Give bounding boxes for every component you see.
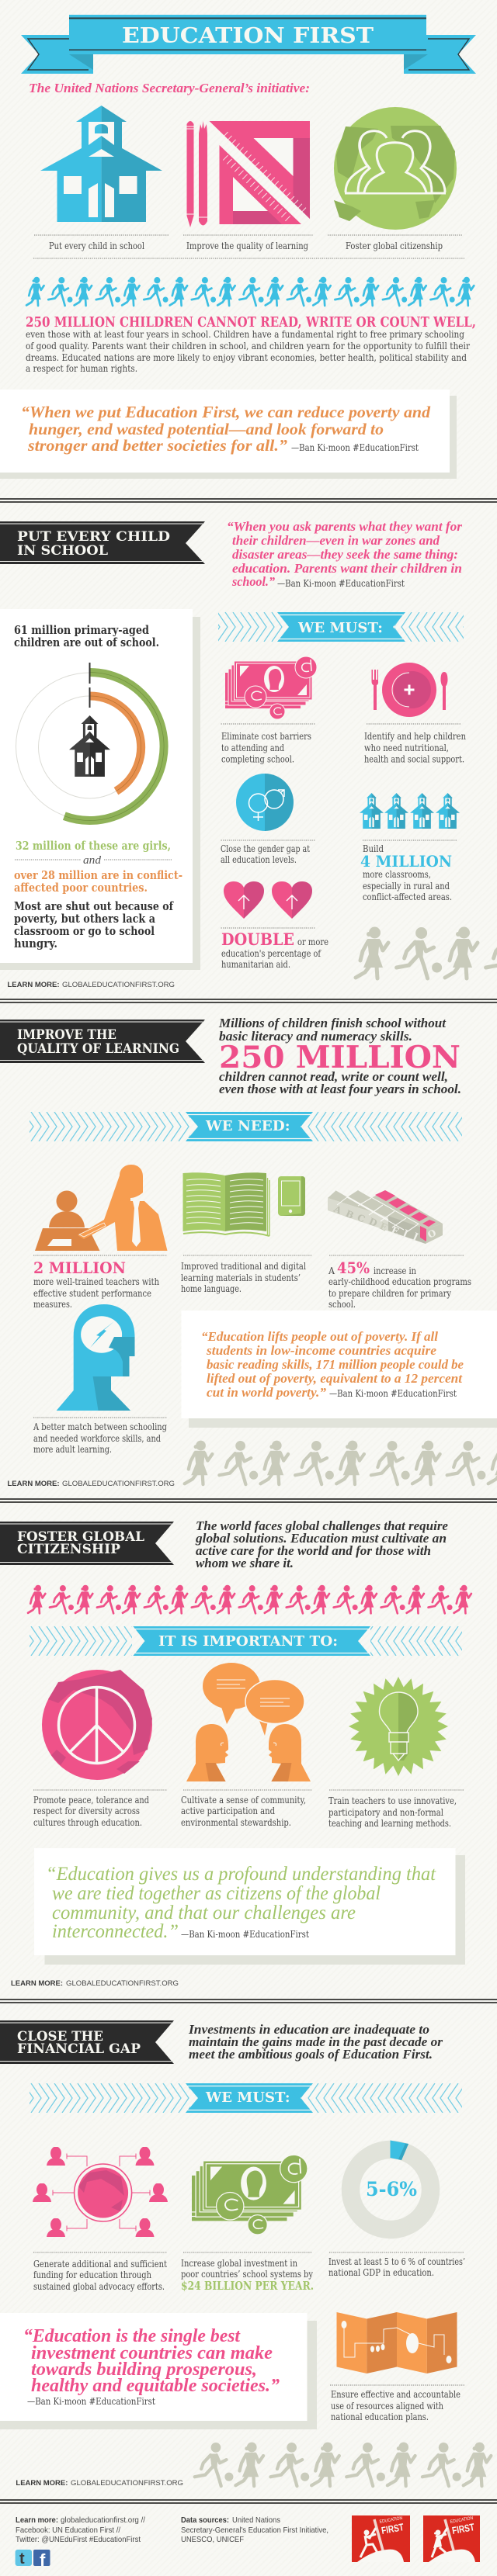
text: early childhood: school. bbox=[328, 1298, 356, 1310]
quote panel: lifts people out of poverty bbox=[182, 1311, 497, 1428]
action text: gender gap: all education levels. bbox=[221, 853, 297, 865]
quote panel: Ban Ki-moon orange: —Ban Ki-moon #EducationFirst bbox=[291, 441, 419, 453]
text: GDP: national GDP in education. bbox=[328, 2266, 434, 2278]
learn more link: LEARN MORE: bbox=[8, 1480, 59, 1488]
text: global challenges: global solutions. Education must cultivate an bbox=[195, 1531, 447, 1546]
learn more link bbox=[8, 1480, 175, 1488]
learn more link: LEARN MORE: bbox=[16, 2479, 68, 2488]
logo: education first climber, female: FIRST bbox=[451, 2521, 475, 2536]
quote panel: Ban Ki-moon orange: hunger, end wasted potential—and look forward to bbox=[29, 420, 384, 438]
section banner: put every child in school: PUT EVERY CHILD bbox=[17, 529, 170, 544]
quote panel: single best investment: healthy and equitable societies.” bbox=[31, 2376, 280, 2396]
chart: 5-6% donut: 5-6% bbox=[366, 2178, 417, 2200]
text: learning materials: Improved traditional and digital bbox=[181, 1260, 306, 1272]
icon: alphabet blocks: E bbox=[390, 1224, 401, 1237]
learn more link bbox=[11, 1979, 179, 1988]
icon: book and phone bbox=[183, 1172, 305, 1236]
footer: contact links bbox=[16, 2515, 145, 2544]
text: most are shut out: hungry. bbox=[14, 937, 57, 950]
icon: alphabet blocks: C bbox=[356, 1212, 367, 1225]
text: accountable resources: national education plans. bbox=[331, 2411, 429, 2422]
action text: nutrition: who need nutritional, bbox=[364, 742, 449, 753]
footer: data sources: Data sources: bbox=[181, 2515, 229, 2525]
quote panel: single best investment bbox=[0, 2313, 317, 2429]
text: promote peace: respect for diversity across bbox=[33, 1805, 140, 1816]
intro text block bbox=[26, 315, 476, 374]
quote panel: single best investment: towards building prosperous, bbox=[31, 2360, 257, 2380]
icon: global advocacy network bbox=[33, 2146, 168, 2237]
quote panel: lifts people out of poverty: students in low-income countries acquire bbox=[206, 1343, 436, 1358]
text: community: environmental stewardship. bbox=[181, 1816, 291, 1828]
text: global investment: Increase global investment in bbox=[181, 2257, 297, 2269]
learn more link: GLOBALEDUCATIONFIRST.ORG bbox=[62, 1480, 175, 1488]
text: 250 million stat: basic literacy and numeracy skills. bbox=[219, 1029, 412, 1044]
banner: we must (section 4): WE MUST: bbox=[205, 2090, 290, 2106]
runners row: grey section 2 bbox=[185, 1441, 497, 1484]
text: train teachers: participatory and non-formal bbox=[328, 1806, 443, 1818]
divider bbox=[0, 2000, 497, 2003]
learn more link bbox=[8, 981, 175, 989]
text: investments inadequate bbox=[188, 2022, 443, 2062]
section banner: foster global citizenship: FOSTER GLOBAL bbox=[17, 1529, 144, 1544]
icon: facebook: f bbox=[40, 2550, 46, 2570]
text: promote peace: Promote peace, tolerance and bbox=[33, 1794, 149, 1806]
icon: speech heads bbox=[186, 1663, 311, 1781]
learn more link: LEARN MORE: bbox=[11, 1979, 63, 1988]
action text: gender gap: Close the gender gap at bbox=[221, 843, 310, 854]
text: global challenges: whom we share it. bbox=[196, 1556, 294, 1570]
text: teachers: effective student performance bbox=[33, 1287, 151, 1299]
text: teachers bbox=[33, 1255, 167, 1310]
quote: parents want education: their children—even in war zones and bbox=[232, 533, 440, 548]
text: teachers: measures. bbox=[33, 1298, 72, 1310]
panel: out of school bbox=[0, 609, 200, 970]
text: community bbox=[181, 1790, 312, 1828]
text: 250 million stat: children cannot read, write or count well, bbox=[219, 1069, 448, 1084]
icon: twitter: t bbox=[19, 2550, 25, 2567]
divider bbox=[0, 1499, 497, 1502]
action text: 4 million classrooms: Build bbox=[363, 843, 384, 854]
icon: gender symbols bbox=[236, 774, 294, 831]
text: global investment: $24 BILLION PER YEAR. bbox=[181, 2279, 314, 2293]
quote: parents want education: education. Parents want their children in bbox=[232, 561, 462, 576]
action text: double aid: DOUBLE bbox=[221, 930, 294, 949]
initiative captions: Improve the quality of learning bbox=[186, 240, 308, 251]
text: workforce skills: more adult learning. bbox=[33, 1443, 112, 1455]
action text: 4 million classrooms: especially in rural and bbox=[363, 880, 450, 892]
text: global investment bbox=[181, 2252, 314, 2293]
section banner: close the financial gap: FINANCIAL GAP bbox=[17, 2041, 141, 2056]
quote panel: single best investment: investment countries can make bbox=[31, 2343, 273, 2363]
stat: 28 million: over 28 million are in conflict- bbox=[14, 868, 182, 882]
intro text block: a respect for human rights. bbox=[26, 362, 137, 374]
quote panel: green citizens: “Education gives us a profound understanding that bbox=[46, 1864, 436, 1885]
heading: 61 million: children are out of school. bbox=[14, 636, 159, 649]
text: accountable resources bbox=[330, 2385, 464, 2422]
footer: data sources: UNESCO, UNICEF bbox=[181, 2535, 244, 2544]
text: train teachers: Train teachers to use innovative, bbox=[328, 1795, 457, 1806]
runners row: grey section 4 bbox=[195, 2443, 491, 2486]
section banner: improve quality bbox=[0, 1020, 205, 1063]
quote panel: green citizens: interconnected.” bbox=[52, 1921, 179, 1942]
text: learning materials: home language. bbox=[181, 1283, 242, 1294]
action text: double aid: humanitarian aid. bbox=[221, 958, 290, 970]
learn more link: GLOBALEDUCATIONFIRST.ORG bbox=[62, 981, 175, 989]
text: community: Cultivate a sense of community, bbox=[181, 1794, 306, 1806]
chart: 5-6% donut bbox=[351, 2140, 430, 2230]
initiative captions: Put every child in school bbox=[49, 240, 144, 251]
text: advocacy: funding for education through bbox=[33, 2269, 151, 2280]
icon: folded map bbox=[337, 2312, 457, 2373]
subtitle: The United Nations Secretary-General’s initiative: bbox=[29, 81, 310, 95]
icon: blue school bbox=[40, 106, 162, 222]
logo: education first climber, male: FIRST bbox=[381, 2521, 405, 2536]
banner: it is important to bbox=[30, 1626, 462, 1656]
text: investments inadequate: meet the ambitious goals of Education First. bbox=[189, 2047, 433, 2062]
text: global challenges bbox=[195, 1518, 448, 1570]
logo: education first climber, male: EDUCATION bbox=[379, 2516, 403, 2525]
action text: double aid: education's percentage of bbox=[221, 947, 321, 959]
stat: 28 million: affected poor countries. bbox=[14, 881, 148, 895]
section banner: close the financial gap bbox=[0, 2020, 174, 2064]
action text: cost barriers: Eliminate cost barriers bbox=[221, 730, 311, 742]
logo: education first climber, female: EDUCATION bbox=[450, 2516, 474, 2525]
icon: alphabet blocks bbox=[328, 1190, 443, 1244]
section banner: improve quality: IMPROVE THE bbox=[17, 1027, 116, 1042]
logo: education first climber, female bbox=[423, 2515, 480, 2562]
action text: 4 million classrooms: conflict-affected areas. bbox=[363, 891, 452, 902]
runners row: pink bbox=[28, 1585, 471, 1613]
text: 250 million stat bbox=[218, 1016, 461, 1096]
action text: double aid bbox=[221, 928, 328, 970]
divider bbox=[0, 2500, 497, 2503]
icon: green money bbox=[192, 2155, 308, 2235]
section banner: foster global citizenship bbox=[0, 1522, 174, 1565]
quote: parents want education: school.” bbox=[231, 574, 275, 589]
heading: 61 million: 61 million primary-aged bbox=[14, 624, 149, 637]
action text: 4 million classrooms: 4 MILLION bbox=[360, 852, 452, 871]
banner: we need: WE NEED: bbox=[205, 1118, 290, 1134]
quote panel: lifts people out of poverty: —Ban Ki-moon #EducationFirst bbox=[329, 1387, 457, 1399]
action text: nutrition: health and social support. bbox=[364, 753, 464, 765]
icon: four schools bbox=[360, 793, 460, 829]
action text: cost barriers: to attending and bbox=[221, 742, 284, 753]
quote: parents want education: disaster areas—they seek the same thing: bbox=[232, 547, 458, 562]
footer: data sources bbox=[181, 2515, 328, 2544]
footer: contact links: Facebook: UN Education First // bbox=[16, 2526, 120, 2535]
quote panel: single best investment: —Ban Ki-moon #EducationFirst bbox=[27, 2395, 155, 2407]
quote panel: Ban Ki-moon orange: stronger and better societies for all.” bbox=[27, 436, 288, 455]
text: global challenges: The world faces global challenges that require bbox=[196, 1518, 448, 1533]
footer: data sources: Secretary-General's Education First Initiative, bbox=[181, 2526, 328, 2535]
icon: head with lightning bbox=[57, 1304, 135, 1411]
banner: it is important to: IT IS IMPORTANT TO: bbox=[158, 1633, 338, 1650]
section banner: improve quality: QUALITY OF LEARNING bbox=[17, 1041, 179, 1056]
icon: alphabet blocks: A bbox=[332, 1203, 344, 1217]
quote panel: green citizens: community, and that our challenges are bbox=[52, 1903, 356, 1923]
initiative captions bbox=[33, 235, 464, 258]
text: global investment: poor countries’ school systems by bbox=[181, 2268, 314, 2280]
banner: we must (section 1): WE MUST: bbox=[297, 620, 383, 636]
text: early childhood: increase in bbox=[374, 1265, 416, 1276]
title ribbon bbox=[21, 15, 476, 74]
text: investments inadequate: Investments in education are inadequate to bbox=[188, 2022, 429, 2037]
text: early childhood: A bbox=[328, 1265, 335, 1276]
runners row: grey section 1 bbox=[356, 926, 497, 978]
text: workforce skills: and needed workforce skills, and bbox=[33, 1432, 161, 1444]
icon: two hearts bbox=[224, 881, 312, 919]
text: train teachers bbox=[328, 1790, 464, 1829]
icon: alphabet blocks: B bbox=[344, 1208, 356, 1221]
logo: education first climber, male bbox=[352, 2515, 410, 2562]
banner: we must (section 4) bbox=[30, 2083, 462, 2113]
quote: parents want education: —Ban Ki-moon #EducationFirst bbox=[277, 577, 405, 589]
action text: cost barriers bbox=[221, 724, 315, 765]
icon: peace globe bbox=[42, 1670, 152, 1780]
runners row: blue bbox=[26, 277, 474, 306]
text: early childhood: to prepare children for primary bbox=[328, 1287, 452, 1299]
text: early childhood: 45% bbox=[337, 1259, 370, 1277]
quote panel: Ban Ki-moon orange: “When we put Education First, we can reduce poverty and bbox=[21, 403, 431, 421]
banner: we must (section 1) bbox=[218, 612, 464, 642]
icon: alphabet blocks: J bbox=[411, 1231, 420, 1242]
text: most are shut out: Most are shut out because of bbox=[14, 900, 175, 913]
quote panel: single best investment: “Education is the single best bbox=[23, 2326, 241, 2346]
banner: we need bbox=[30, 1112, 462, 1141]
footer: contact links: globaleducationfirst.org // bbox=[61, 2515, 145, 2525]
action text: nutrition bbox=[364, 724, 466, 765]
text: teachers: 2 MILLION bbox=[33, 1259, 126, 1277]
icon: teacher and student bbox=[35, 1165, 168, 1251]
text: early childhood bbox=[328, 1255, 471, 1310]
chart: concentric progress rings bbox=[16, 663, 164, 821]
text: workforce skills bbox=[33, 1418, 167, 1455]
text: GDP bbox=[328, 2252, 465, 2278]
icon: globe with people bbox=[334, 107, 457, 230]
text: most are shut out: classroom or go to school bbox=[14, 925, 155, 938]
action text: double aid: or more bbox=[297, 936, 328, 947]
icon: idea bulb burst bbox=[349, 1677, 448, 1776]
quote panel: lifts people out of poverty: cut in world poverty.” bbox=[207, 1385, 326, 1400]
footer: data sources: United Nations bbox=[232, 2515, 280, 2525]
learn more link bbox=[16, 2479, 183, 2488]
title text: EDUCATION FIRST bbox=[122, 23, 374, 48]
text: learning materials bbox=[181, 1255, 312, 1294]
icon: twitter bbox=[16, 2550, 32, 2567]
text: 250 million stat: even those with at least four years in school. bbox=[219, 1082, 461, 1096]
text: investments inadequate: maintain the gains made in the past decade or bbox=[189, 2034, 443, 2049]
icon: facebook bbox=[33, 2550, 50, 2570]
text: advocacy: sustained global advocacy efforts. bbox=[33, 2280, 165, 2292]
quote panel: lifts people out of poverty: “Education lifts people out of poverty. If all bbox=[201, 1329, 438, 1344]
footer: contact links: Twitter: @UNEduFirst #EducationFirst bbox=[16, 2535, 141, 2544]
stat: 28 million bbox=[14, 868, 182, 895]
icon: alphabet blocks: J bbox=[401, 1227, 410, 1239]
icon: plate and cutlery bbox=[371, 663, 447, 717]
footer: contact links: Learn more: bbox=[16, 2515, 58, 2525]
divider bbox=[0, 499, 497, 502]
action text: gender gap bbox=[221, 840, 315, 865]
text: 250 million stat: Millions of children finish school without bbox=[218, 1016, 446, 1030]
icon: dark school bbox=[69, 715, 110, 777]
action text: cost barriers: completing school. bbox=[221, 753, 294, 765]
learn more link: LEARN MORE: bbox=[8, 981, 59, 989]
action text: nutrition: Identify and help children bbox=[364, 730, 466, 742]
text: most are shut out bbox=[14, 900, 175, 950]
text: promote peace bbox=[33, 1790, 167, 1828]
section banner: close the financial gap: CLOSE THE bbox=[17, 2029, 103, 2044]
learn more link: GLOBALEDUCATIONFIRST.ORG bbox=[66, 1979, 179, 1988]
action text: 4 million classrooms: more classrooms, bbox=[363, 868, 431, 880]
section banner: foster global citizenship: CITIZENSHIP bbox=[17, 1542, 120, 1556]
quote panel: green citizens bbox=[34, 1848, 465, 1965]
action text: 4 million classrooms bbox=[360, 840, 457, 902]
text: advocacy: Generate additional and sufficient bbox=[33, 2258, 167, 2270]
divider bbox=[0, 999, 497, 1002]
icon: alphabet blocks: E bbox=[378, 1220, 389, 1233]
text: 250 million stat: 250 MILLION bbox=[219, 1040, 461, 1075]
text: global challenges: active care for the world and for those with bbox=[196, 1543, 431, 1558]
icon: pink money bbox=[225, 656, 317, 718]
quote: parents want education bbox=[227, 519, 462, 589]
text: train teachers: teaching and learning methods. bbox=[328, 1817, 451, 1829]
learn more link: GLOBALEDUCATIONFIRST.ORG bbox=[71, 2479, 183, 2488]
text: advocacy bbox=[33, 2252, 167, 2292]
text: accountable resources: Ensure effective and accountable bbox=[331, 2388, 461, 2400]
connector: and: and bbox=[83, 854, 102, 867]
quote panel: green citizens: we are tied together as citizens of the global bbox=[52, 1883, 381, 1904]
icon: alphabet blocks: D bbox=[367, 1216, 379, 1229]
quote panel: lifts people out of poverty: basic reading skills, 171 million people could be bbox=[207, 1357, 464, 1372]
text: most are shut out: poverty, but others lack a bbox=[14, 912, 156, 926]
text: accountable resources: use of resources aligned with bbox=[331, 2400, 443, 2412]
text: learning materials: learning materials in students’ bbox=[181, 1272, 301, 1283]
stat: 32 million girls: 32 million of these are girls, bbox=[16, 839, 171, 853]
quote panel: Ban Ki-moon orange bbox=[0, 390, 457, 479]
initiative captions: Foster global citizenship bbox=[346, 240, 443, 251]
section banner: put every child in school bbox=[0, 521, 205, 564]
quote: parents want education: “When you ask parents what they want for bbox=[227, 519, 462, 534]
quote panel: green citizens: —Ban Ki-moon #EducationFirst bbox=[181, 1928, 309, 1940]
text: community: active participation and bbox=[181, 1805, 275, 1816]
quote panel: lifts people out of poverty: lifted out of poverty, equivalent to a 12 percent bbox=[207, 1371, 463, 1386]
heading: 61 million bbox=[14, 624, 159, 649]
text: workforce skills: A better match between schooling bbox=[33, 1421, 167, 1432]
icon: pencil pen and set squares bbox=[186, 121, 310, 227]
section banner: put every child in school: IN SCHOOL bbox=[17, 543, 108, 558]
text: teachers: more well-trained teachers with bbox=[33, 1276, 159, 1287]
text: promote peace: cultures through education. bbox=[33, 1816, 142, 1828]
icon: alphabet blocks: O bbox=[426, 1227, 438, 1241]
